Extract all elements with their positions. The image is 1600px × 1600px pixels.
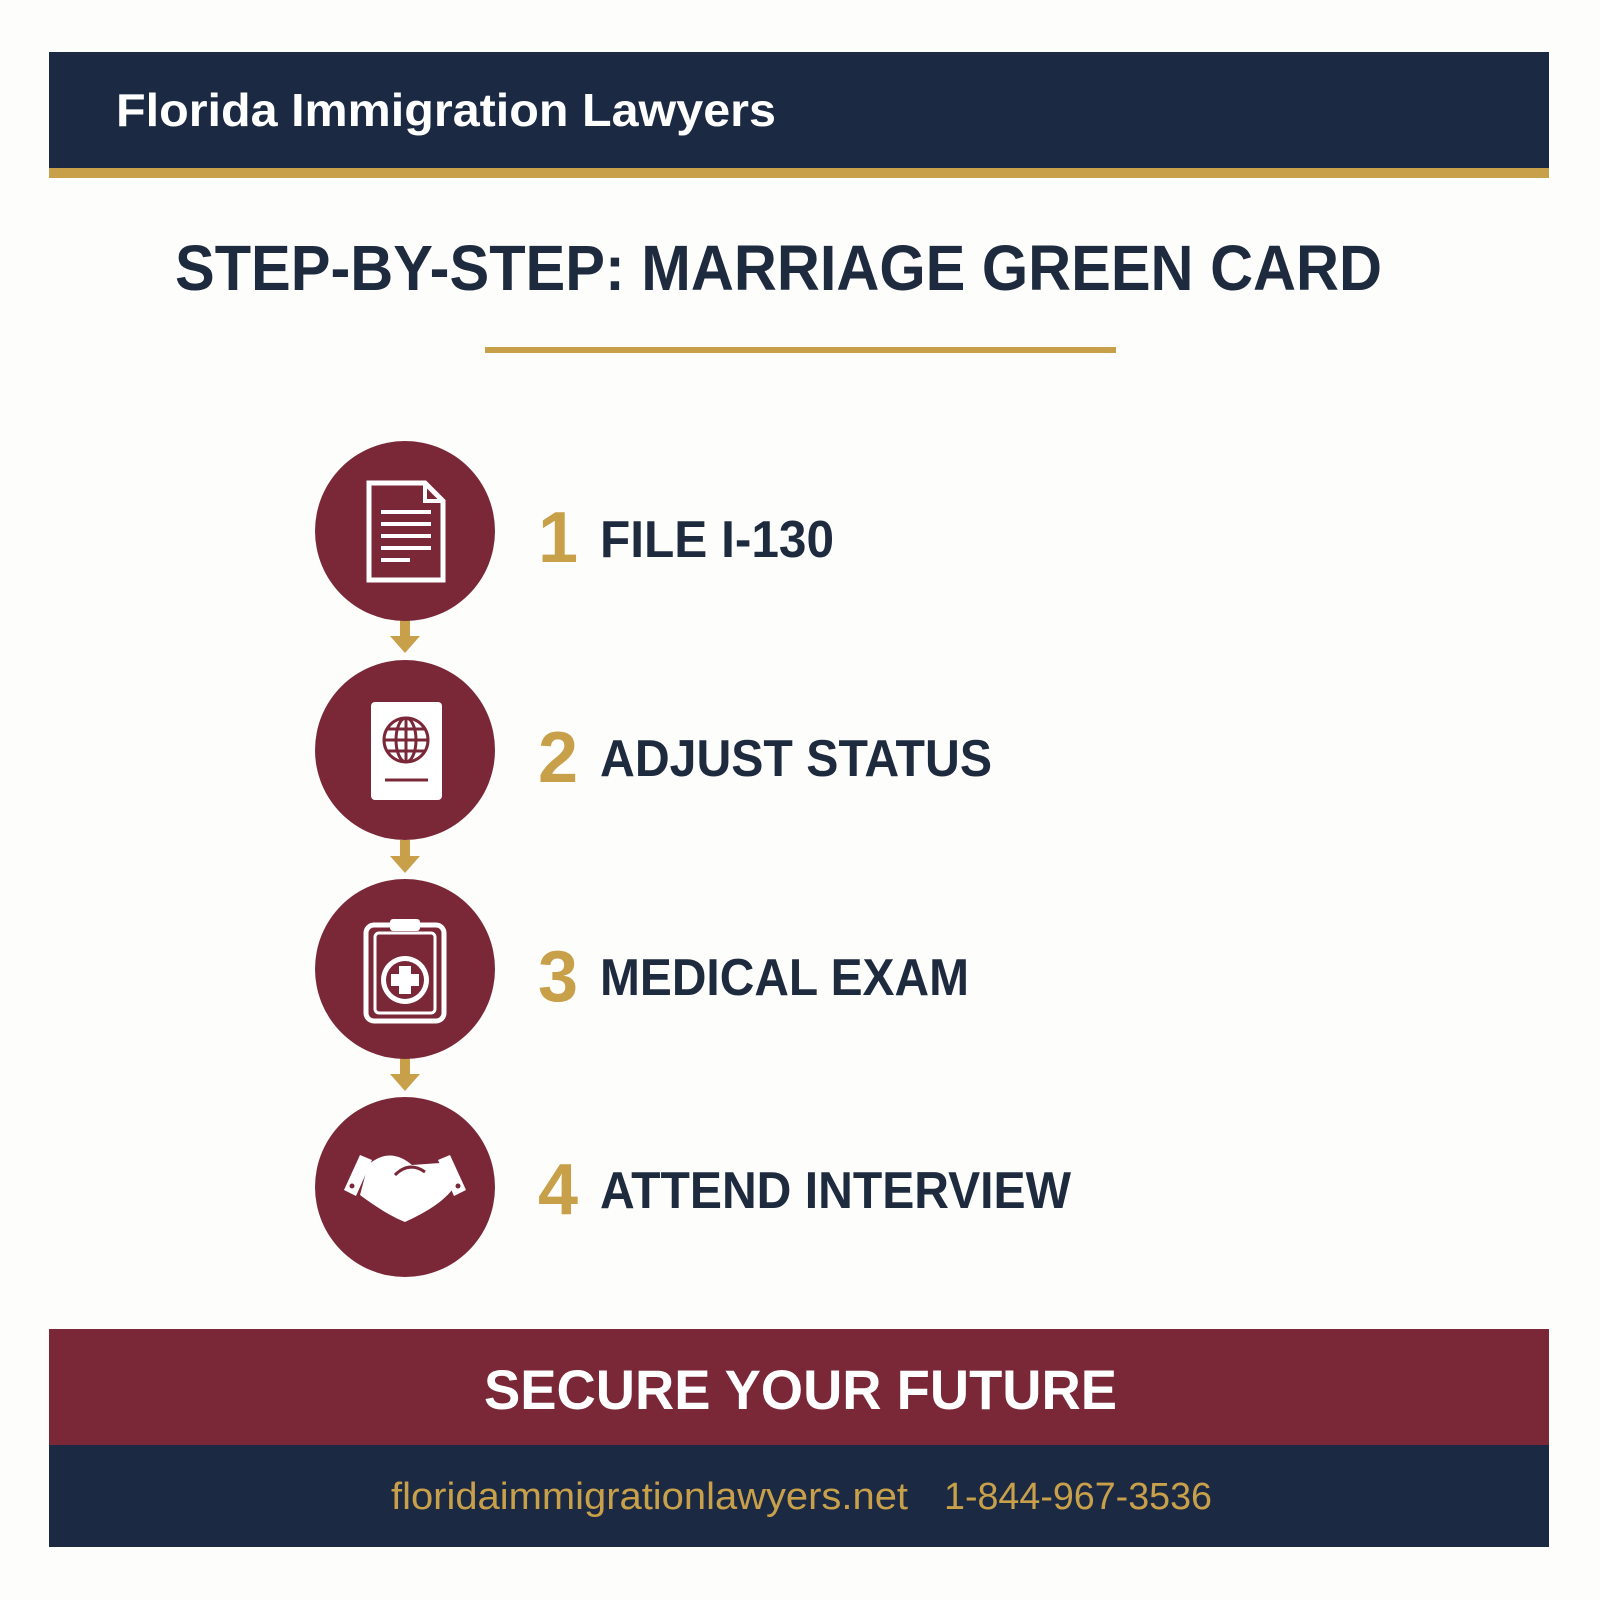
call-to-action banner: SECURE YOUR FUTURE: [484, 1358, 1117, 1421]
website: floridaimmigrationlawyers.net: [391, 1476, 908, 1518]
arrow 3: [390, 1058, 420, 1091]
title underline: [485, 347, 1116, 353]
step 1 number: 1: [538, 498, 578, 578]
arrow 1: [390, 620, 420, 653]
footer contact bar: [49, 1445, 1549, 1547]
step 1 label: FILE I-130: [600, 511, 834, 569]
title: STEP-BY-STEP: MARRIAGE GREEN CARD: [175, 232, 1382, 304]
phone: 1-844-967-3536: [944, 1476, 1212, 1518]
step 1: [315, 441, 834, 621]
step 3 label: MEDICAL EXAM: [600, 949, 969, 1007]
call-to-action banner: [49, 1329, 1549, 1445]
step 3: [315, 879, 969, 1059]
step 2 label: ADJUST STATUS: [600, 730, 992, 788]
header brand text: Florida Immigration Lawyers: [116, 84, 776, 136]
header bar: [49, 52, 1549, 178]
icon: medical clipboard: [315, 879, 495, 1059]
step 4 label: ATTEND INTERVIEW: [600, 1162, 1072, 1220]
step 2 number: 2: [538, 718, 578, 798]
icon: handshake: [315, 1097, 495, 1277]
icon: passport: [315, 660, 495, 840]
step 3 number: 3: [538, 937, 578, 1017]
icon: document: [315, 441, 495, 621]
arrow 2: [390, 840, 420, 873]
step 4 number: 4: [538, 1150, 578, 1230]
step 2: [315, 660, 992, 840]
step 4: [315, 1097, 1072, 1277]
